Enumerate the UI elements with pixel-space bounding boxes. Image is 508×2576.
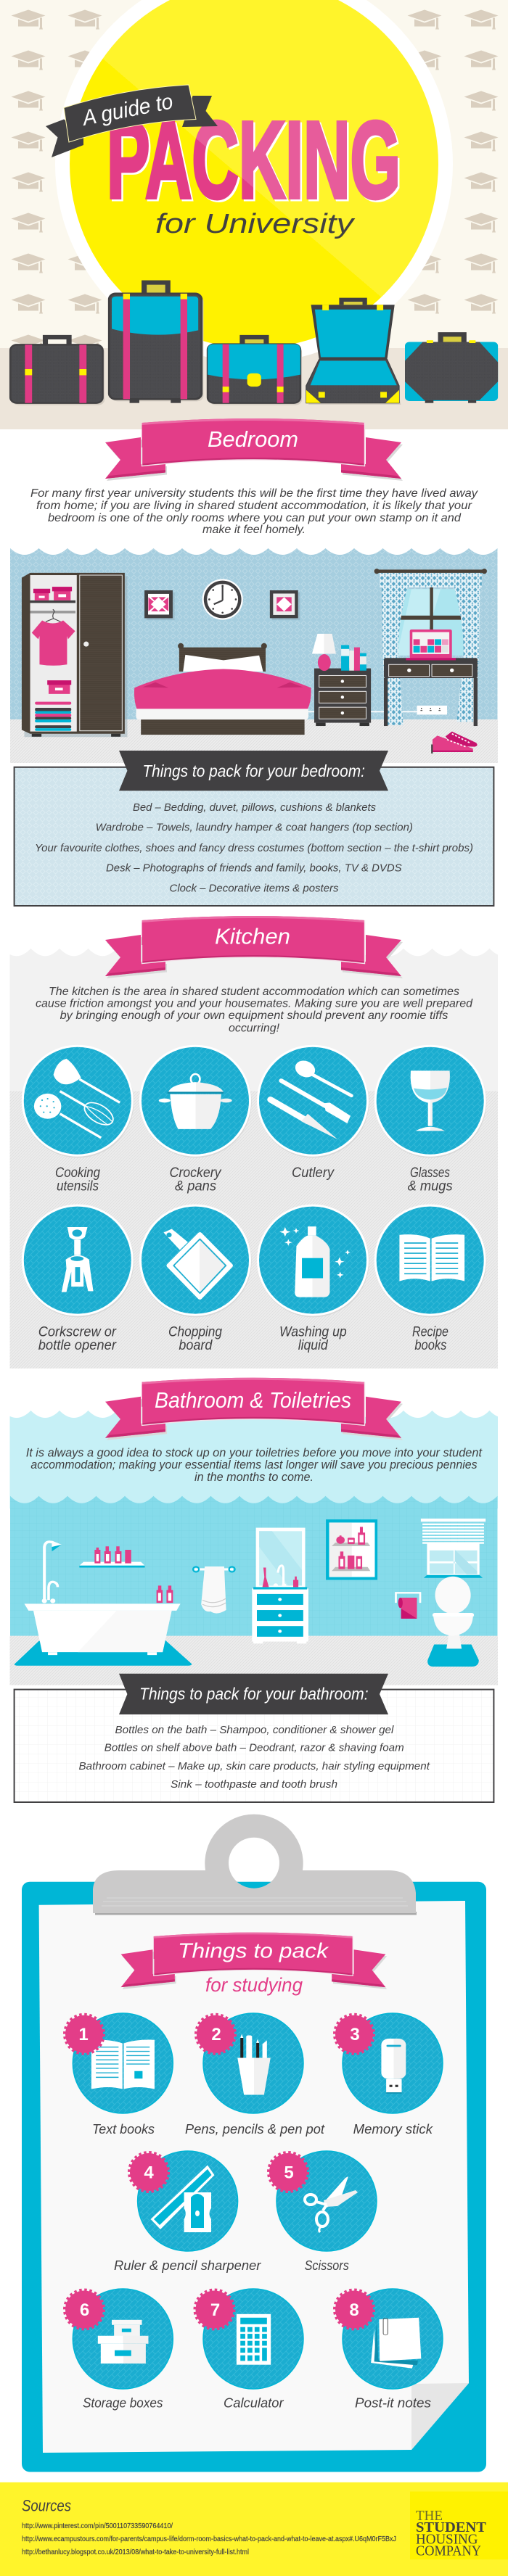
panel: footer (0, 2482, 508, 2576)
clipboard backing (22, 1882, 486, 2472)
banner: Things to pack for your bedroom: (142, 761, 365, 780)
item: recipe books (374, 1205, 486, 1353)
number badge 5 (269, 2152, 308, 2192)
bottles on bath (157, 1585, 173, 1603)
bathroom list: Bottles on the bath – Shampoo, conditioner & shower gel (115, 1724, 394, 1736)
item: recipe books: books (414, 1338, 447, 1353)
storage boxes in wardrobe (33, 587, 72, 694)
bedroom ribbon (105, 418, 403, 481)
bathroom intro text (26, 1446, 483, 1484)
bathroom intro text: It is always a good idea to stock up on your toiletries before you move into your student (26, 1446, 483, 1459)
item: corkscrew or bottle opener (22, 1205, 134, 1353)
wire and socket (308, 706, 447, 714)
bedside table (314, 669, 371, 726)
logo: The Student Housing Company: STUDENT (416, 2519, 487, 2535)
source links: http://bethanlucy.blogspot.co.uk/2013/08/what-to-take-to-university-full-list.html (22, 2548, 249, 2556)
number badge 2 (196, 2015, 235, 2054)
studying ribbon: Things to pack (178, 1940, 329, 1963)
kitchen ribbon: Kitchen (215, 924, 290, 949)
suitcase 1 (10, 337, 105, 405)
number badge 8 (335, 2290, 374, 2329)
bedroom intro text (30, 487, 478, 536)
kitchen ribbon (105, 916, 403, 978)
item: recipe books: Recipe (412, 1324, 448, 1340)
number badge 2: 2 (211, 2025, 221, 2044)
bathroom list: Bathroom cabinet – Make up, skin care products, hair styling equipment (78, 1760, 430, 1772)
subheading: for studying: for studying (205, 1974, 303, 1996)
bedroom ribbon: Bedroom (208, 426, 298, 452)
sources heading: Sources (22, 2497, 71, 2515)
logo: The Student Housing Company: COMPANY (416, 2543, 481, 2559)
bathroom intro text: accommodation; making your essential items last longer will save you precious pennies (30, 1458, 478, 1471)
number badge 4 (129, 2152, 168, 2192)
towel rail and towel (193, 1566, 235, 1614)
banner: Things to pack for your bathroom: (139, 1684, 369, 1703)
laptop (406, 629, 456, 660)
number badge 7: 7 (210, 2300, 220, 2320)
item 4: ruler and pencil sharpener (114, 2151, 261, 2273)
panel: bathroom intro (0, 1378, 508, 1512)
number badge 5: 5 (284, 2163, 294, 2183)
panel: kitchen (0, 916, 508, 1368)
graduation cap pattern (12, 10, 498, 354)
t-shirt on hanger (32, 609, 75, 666)
banner (119, 1674, 388, 1714)
item: glasses and mugs: Glasses (410, 1165, 450, 1181)
window with blind (421, 1519, 486, 1578)
item 7: calculator: Calculator (224, 2395, 284, 2411)
panel: clipboard things to pack for studying (22, 1815, 486, 2472)
suitcases (10, 283, 498, 405)
window (397, 585, 467, 657)
number badge 3: 3 (350, 2025, 360, 2044)
item 1: text books (65, 2013, 173, 2137)
item: washing up liquid: Washing up (279, 1324, 347, 1340)
shelf above bath with bottles (79, 1546, 145, 1568)
item: cooking utensils (22, 1045, 134, 1194)
item: crockery and pans: Crockery (170, 1165, 222, 1181)
item 2: pens, pencils and pen pot (185, 2013, 325, 2137)
item: chopping board (139, 1205, 252, 1353)
number badge 6 (65, 2290, 104, 2329)
bedroom list: Bed – Bedding, duvet, pillows, cushions & blankets (133, 801, 376, 814)
lamp (312, 634, 336, 671)
kitchen intro text: occurring! (229, 1023, 280, 1034)
desk (384, 658, 478, 726)
bedroom intro text: For many first year university students this will be the first time they have lived away (30, 487, 478, 500)
logo: The Student Housing Company: THE (416, 2508, 443, 2524)
yellow circle with white ring (55, 0, 453, 363)
item: cooking utensils: utensils (57, 1179, 99, 1194)
toilet paper (396, 1593, 420, 1619)
bedroom list: Clock – Decorative items & posters (170, 883, 339, 895)
bath (24, 1540, 181, 1655)
bedroom intro text: bedroom is one of the only rooms where you can put your own stamp on it and (48, 512, 462, 524)
panel: bathroom scene (10, 1496, 498, 1685)
bathroom intro text: in the months to come. (194, 1471, 314, 1484)
bedroom list: Desk – Photographs of friends and family, books, TV & DVDS (106, 862, 402, 875)
item: corkscrew or bottle opener: bottle opener (38, 1338, 117, 1353)
metal clip (93, 1815, 417, 1915)
subtitle: for University: for University (155, 209, 355, 239)
bathroom list: Sink – toothpaste and tooth brush (171, 1778, 337, 1791)
sneakers (431, 732, 478, 754)
kitchen intro text: cause friction amongst you and your housemates. Making sure you are well prepared (36, 998, 473, 1010)
bedroom list: Your favourite clothes, shoes and fancy dress costumes (bottom section – the t-shirt probs) (35, 842, 473, 854)
source links (22, 2522, 396, 2556)
number badge 3 (335, 2015, 374, 2054)
number badge 8: 8 (349, 2300, 359, 2320)
ribbon: A guide to (46, 85, 218, 157)
item: cooking utensils: Cooking (55, 1165, 100, 1181)
item: washing up liquid (257, 1205, 369, 1353)
source links: http://www.ecampustours.com/for-parents/campus-life/dorm-room-basics-what-to-pack-and-what-to-leave-at.aspx#.U6qM0rF5BxJ (22, 2535, 396, 2543)
item: chopping board: Chopping (168, 1324, 222, 1340)
bedroom intro text: from home; if you are living in shared student accommodation, it is likely that your (36, 500, 472, 512)
toilet and mat (427, 1577, 479, 1667)
item: glasses and mugs (374, 1045, 486, 1194)
kitchen intro text: by bringing enough of your own equipment should prevent any roomie tiffs (60, 1010, 448, 1022)
item 7: calculator (194, 2289, 303, 2411)
folded clothes (35, 702, 71, 731)
logo: The Student Housing Company: HOUSING (416, 2532, 478, 2548)
item 6: storage boxes (65, 2289, 173, 2411)
suitcase 2 (109, 283, 203, 403)
bedroom intro text: make it feel homely. (202, 524, 306, 536)
banner (119, 751, 388, 790)
number badge 1: 1 (78, 2025, 89, 2044)
number badge 1 (65, 2015, 104, 2054)
item: cutlery: Cutlery (292, 1165, 335, 1181)
item 3: memory stick (335, 2013, 443, 2137)
item: cutlery (257, 1045, 369, 1181)
item 6: storage boxes: Storage boxes (83, 2395, 163, 2411)
suitcase 5 (405, 334, 498, 403)
item 3: memory stick: Memory stick (353, 2121, 434, 2137)
item 5: scissors: Scissors (305, 2258, 349, 2273)
panel: bedroom scene (10, 548, 498, 763)
wall cabinet (326, 1519, 377, 1580)
source links: http://www.pinterest.com/pin/500110733590764410/ (22, 2522, 173, 2530)
item: glasses and mugs: & mugs (408, 1179, 453, 1194)
books on bedside (341, 645, 366, 671)
panel: things to pack for your bathroom (15, 1674, 493, 1802)
item 2: pens, pencils and pen pot: Pens, pencils & pen pot (185, 2121, 325, 2137)
bathroom list (78, 1724, 430, 1791)
item: washing up liquid: liquid (298, 1338, 329, 1353)
logo: The Student Housing Company (410, 2492, 508, 2559)
paper sheet (39, 1901, 469, 2453)
panel: bedroom intro (30, 418, 478, 536)
sink cabinet (252, 1566, 308, 1643)
ribbon: A guide to: A guide to (79, 89, 175, 131)
kitchen intro text: The kitchen is the area in shared student accommodation which can sometimes (49, 986, 459, 998)
number badge 7 (194, 2290, 234, 2329)
item: crockery and pans: & pans (175, 1179, 216, 1194)
curtains (374, 569, 487, 725)
studying ribbon (121, 1933, 387, 1989)
item 5: scissors (269, 2151, 377, 2273)
number badge 4: 4 (144, 2163, 154, 2183)
bathroom list: Bottles on shelf above bath – Deodrant, razor & shaving foam (105, 1742, 404, 1754)
item 8: post-it notes: Post-it notes (355, 2395, 431, 2411)
bedroom list: Wardrobe – Towels, laundry hamper & coat hangers (top section) (96, 822, 413, 834)
picture frame right (270, 590, 300, 620)
suitcase 3 (208, 337, 302, 405)
mirror (256, 1528, 306, 1587)
bath mat (15, 1640, 192, 1666)
wardrobe (22, 573, 127, 737)
picture frame left (144, 590, 175, 620)
kitchen intro text (36, 986, 473, 1034)
bathroom ribbon: Bathroom & Toiletries (155, 1387, 351, 1413)
bed (134, 643, 311, 735)
bathroom ribbon (105, 1378, 403, 1440)
header panel (0, 0, 508, 429)
suitcase 4: open (306, 300, 401, 405)
bedroom list (35, 801, 473, 895)
item: chopping board: board (179, 1338, 213, 1353)
wall clock (202, 579, 243, 620)
item: corkscrew or bottle opener: Corkscrew or (38, 1324, 117, 1340)
item 4: ruler and pencil sharpener: Ruler & pencil sharpener (114, 2258, 261, 2273)
number badge 6: 6 (80, 2300, 89, 2320)
item 1: text books: Text books (92, 2121, 155, 2137)
item 8: post-it notes (335, 2289, 443, 2411)
panel: things to pack for your bedroom (15, 751, 493, 906)
item: crockery and pans (139, 1045, 252, 1194)
